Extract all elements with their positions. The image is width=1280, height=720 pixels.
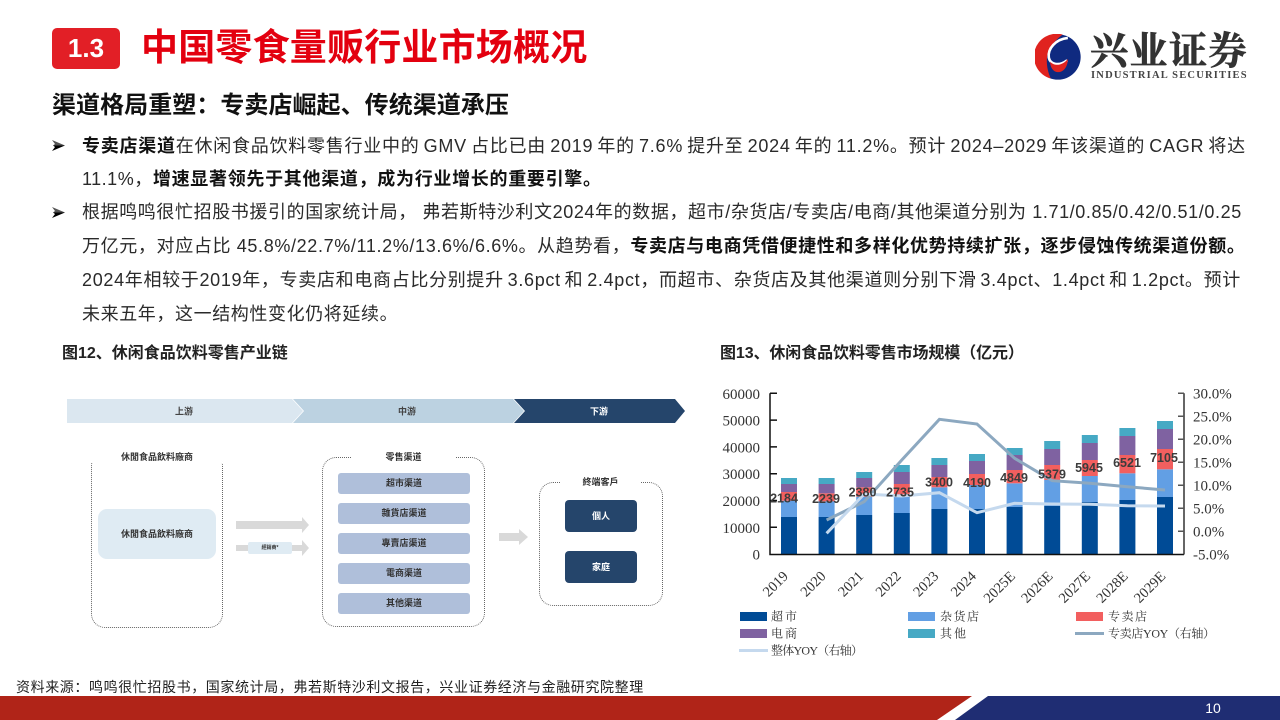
year labels: 2023 [910,569,942,600]
upstream panel heading [89,451,225,463]
right axis labels: 5.0% [1193,502,1224,518]
channel: supermarket: 超市渠道 [386,478,422,488]
panel: retail channels [322,452,485,627]
right axis labels: 10.0% [1193,478,1232,494]
figure 13 caption: 图13、休闲食品饮料零售市场规模（亿元） [720,345,1024,362]
legend: 其他 [940,626,968,640]
left axis labels [722,387,760,564]
icon: swirl emblem [1035,34,1081,80]
stacked bars [781,421,1173,554]
customer: individual [565,500,637,532]
text block: channel commentary [52,136,1246,324]
customers panel heading [560,474,641,490]
retail panel heading: 零售渠道 [385,452,422,462]
section badge [52,28,120,69]
chart: snack retail market size [722,386,1232,658]
channel: e-commerce [338,563,470,584]
bullet 2 [52,207,65,218]
year labels [760,568,1169,607]
left axis labels: 10000 [722,521,760,537]
chevron band: upstream, midstream, downstream: 上游 [175,406,193,416]
legend: 杂货店 [940,608,981,624]
right axis labels: 15.0% [1193,456,1232,472]
paragraph 2 line 3: 2024年相较于2019年，专卖店和电商占比分别提升 3.6pct 和 2.4pct，而超市、杂货店及其他渠道则分别下滑 3.4pct、1.4pct 和 1.2pct。预计 [82,270,1241,290]
chevron band: upstream, midstream, downstream: 下游 [590,406,608,416]
specialty store data labels: 6521 [1113,456,1141,470]
left axis labels: 40000 [722,440,760,456]
line: overall YOY [827,493,1165,533]
chevron band: upstream, midstream, downstream [67,399,685,423]
customer: household [565,551,637,583]
arrow: direct to retail [236,517,309,533]
year labels: 2026E [1018,568,1057,607]
year labels: 2024 [948,568,980,600]
right axis labels: 25.0% [1193,410,1232,426]
arrow: through distributor [236,540,309,556]
year labels: 2025E [981,568,1019,607]
paragraph 2 line 1: 根据鸣鸣很忙招股书援引的国家统计局， 弗若斯特沙利文2024年的数据，超市/杂货店/专卖店/电商/其他渠道分别为 1.71/0.85/0.42/0.51/0.25 [82,202,1242,222]
specialty store data labels: 3400 [925,476,953,490]
channel: e-commerce: 電商渠道 [386,568,422,578]
line: specialty store YOY [827,419,1165,520]
specialty store data labels: 2380 [849,486,876,500]
legend: 整体YOY（右轴） [771,642,863,658]
channel: specialty store [338,533,470,554]
bullet 1 [52,140,65,151]
footer band [0,696,1280,720]
year labels: 2020 [798,569,829,600]
distributor label [248,542,292,554]
paragraph 1 line 1: 专卖店渠道在休闲食品饮料零售行业中的 GMV 占比已由 2019 年的 7.6% 提升至 2024 年的 11.2%。预计 2024–2029 年该渠道的 CAGR 将达 [82,136,1246,156]
left axis labels: 30000 [722,467,760,483]
year labels: 2027E [1056,568,1094,607]
panel: end customers [539,477,663,606]
channel: grocery: 雜貨店渠道 [381,508,426,518]
specialty store data labels: 2735 [886,486,914,500]
channel: supermarket [338,473,470,494]
year labels: 2021 [835,569,867,600]
specialty store data labels: 5379 [1038,468,1066,482]
upstream panel heading: 休閒食品飲料廠商 [121,452,193,462]
upstream manufacturer box: 休閒食品飲料廠商 [121,529,193,539]
page number: 10 [1205,700,1221,716]
arrow: retail to customers [499,529,528,545]
specialty store data labels: 2184 [770,492,798,506]
retail panel heading [351,449,456,465]
channel: grocery [338,503,470,524]
diagram: industry chain [67,399,685,628]
left axis labels: 60000 [722,387,760,403]
customer: individual: 個人 [592,511,610,521]
specialty store data labels: 5945 [1075,461,1103,475]
paragraph 2 line 2: 万亿元，对应占比 45.8%/22.7%/11.2%/13.6%/6.6%。从趋势看，专卖店与电商凭借便捷性和多样化优势持续扩张，逐步侵蚀传统渠道份额。 [82,236,1246,256]
upstream manufacturer box [98,509,216,559]
channel: other [338,593,470,614]
logo wordmark: 兴业证券 [1090,31,1248,73]
right axis labels: 0.0% [1193,524,1224,540]
year labels: 2019 [760,569,792,600]
right axis labels: -5.0% [1193,548,1229,564]
channel: specialty store: 專賣店渠道 [381,538,426,548]
right axis labels: 30.0% [1193,386,1232,402]
specialty store data labels: 4849 [1000,471,1028,485]
figure 12 caption: 图12、休闲食品饮料零售产业链 [62,345,288,362]
distributor label: 經銷商* [262,545,278,551]
left axis labels: 20000 [722,494,760,510]
customer: household: 家庭 [592,562,610,572]
specialty store data labels: 2239 [812,492,840,506]
axes [770,393,1184,554]
legend: 专卖店 [1108,608,1149,624]
year labels: 2029E [1131,568,1169,607]
year labels: 2022 [873,569,905,600]
subheading: 渠道格局重塑：专卖店崛起、传统渠道承压 [52,92,509,119]
right axis labels [1193,386,1232,564]
legend: 电商 [771,626,799,640]
legend: 专卖店YOY（右轴） [1108,626,1215,640]
legend [739,608,1215,658]
title: 中国零食量贩行业市场概况 [141,27,587,68]
paragraph 2 line 4: 未来五年，这一结构性变化仍将延续。 [82,304,398,324]
logo: Industrial Securities [1035,30,1248,81]
left axis labels: 0 [752,548,760,564]
left axis labels: 50000 [722,414,760,430]
panel: upstream manufacturers [91,452,223,628]
right axis labels: 20.0% [1193,432,1232,448]
customers panel heading: 終端客戶 [582,477,618,487]
channel: other: 其他渠道 [386,598,422,608]
section badge: 1.3 [68,33,104,63]
source note: 资料来源：鸣鸣很忙招股书，国家统计局，弗若斯特沙利文报告，兴业证券经济与金融研究院整理 [16,679,644,695]
paragraph 1 line 2: 11.1%，增速显著领先于其他渠道，成为行业增长的重要引擎。 [82,169,602,189]
specialty store data labels [770,451,1178,506]
chevron band: upstream, midstream, downstream: 中游 [398,406,416,416]
specialty store data labels: 7105 [1150,451,1178,465]
logo English name: INDUSTRIAL SECURITIES [1091,70,1248,81]
year labels: 2028E [1094,568,1132,607]
specialty store data labels: 4190 [963,476,991,490]
legend: 超市 [771,608,799,624]
